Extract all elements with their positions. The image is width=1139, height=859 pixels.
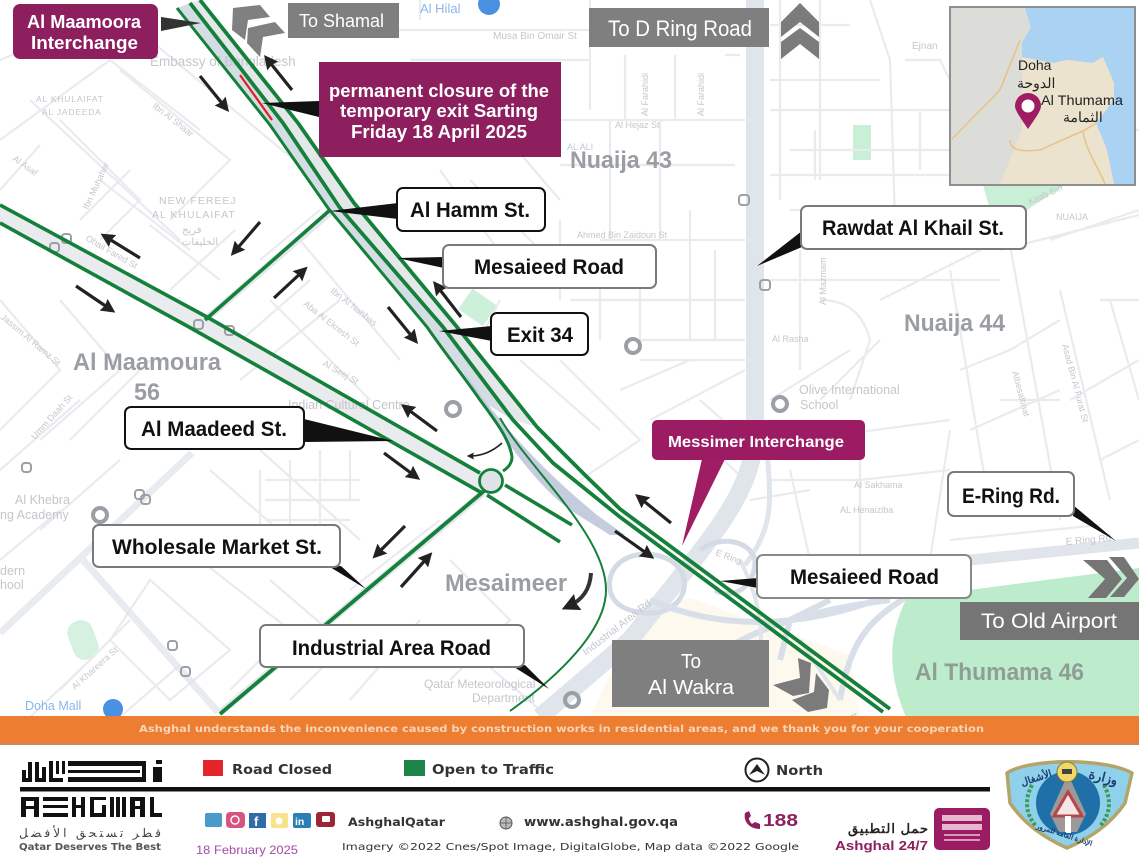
callout: Al Maadeed St.: Al Maadeed St. bbox=[141, 418, 287, 441]
street and place labels: Al Khareera St bbox=[70, 645, 120, 691]
street and place labels: AL Henaiziba bbox=[840, 505, 893, 515]
road: Industrial Area Road bbox=[220, 491, 484, 714]
street and place labels: الخليفات bbox=[182, 237, 218, 248]
traffic department emblem: وزارة bbox=[1087, 766, 1119, 789]
district labels: Nuaija 43 bbox=[570, 147, 672, 174]
legend: open to traffic: Open to Traffic bbox=[432, 762, 554, 778]
callout: Wholesale Market St. bbox=[93, 525, 366, 589]
callout: Exit 34: Exit 34 bbox=[507, 324, 573, 347]
callout: Messimer Interchange bbox=[652, 420, 865, 546]
district labels: Nuaija 44 bbox=[904, 310, 1006, 337]
icon: location pin bbox=[1015, 93, 1041, 129]
street and place labels: Doha Mall bbox=[25, 699, 81, 713]
location inset map: الثمامة bbox=[1063, 109, 1103, 125]
logo: ASHGHAL kufic mark bbox=[21, 797, 162, 817]
legend: north bbox=[746, 758, 823, 782]
district labels: Mesaimeer bbox=[445, 570, 567, 597]
district labels bbox=[73, 147, 1084, 686]
callout: Al Maamoora Interchange: Al Maamoora bbox=[27, 12, 142, 32]
callout: Mesaieed Road north bbox=[397, 245, 656, 288]
callout: E-Ring Rd.: E-Ring Rd. bbox=[962, 485, 1060, 508]
street and place labels: Qatar Meteorological bbox=[424, 677, 535, 691]
street and place labels: Department bbox=[472, 691, 535, 705]
callout: Mesaieed Road north: Mesaieed Road bbox=[474, 256, 624, 279]
direction sign: To D Ring Road bbox=[589, 3, 819, 59]
street and place labels: AL KHULAIFAT bbox=[152, 209, 236, 221]
callout: Mesaieed Road south bbox=[720, 555, 971, 598]
direction sign: To Al Wakra: To bbox=[681, 651, 701, 673]
road: Al Hamm St bbox=[205, 210, 330, 320]
callout: Al Maamoora Interchange bbox=[13, 4, 201, 59]
street and place labels: Ibn Al Nahhas bbox=[329, 286, 379, 328]
social media icons: AshghalQatar bbox=[348, 815, 445, 829]
street and place labels: NEW FEREEJ bbox=[159, 195, 237, 207]
traffic department emblem: الإدارة العامة للمرور bbox=[1034, 822, 1093, 848]
street and place labels: Al Rasha bbox=[772, 334, 809, 344]
footer legend bbox=[20, 758, 990, 792]
direction sign: To Al Wakra: Al Wakra bbox=[648, 677, 735, 699]
direction sign: To Shamal bbox=[232, 3, 399, 57]
road: Mesaieed Road main carriageway bbox=[190, 0, 890, 712]
hotline: 188 bbox=[763, 810, 798, 830]
roundabout bbox=[480, 470, 502, 492]
street and place labels: Umm Daah St bbox=[29, 392, 75, 441]
icon: chevrons down-right bbox=[773, 658, 829, 712]
street and place labels: Al Farahidi bbox=[640, 73, 650, 116]
callout: Wholesale Market St.: Wholesale Market St. bbox=[112, 536, 322, 559]
callout: Mesaieed Road south: Mesaieed Road bbox=[790, 566, 939, 589]
street and place labels: Ejnan bbox=[912, 41, 938, 52]
street and place labels: Olive International bbox=[799, 383, 900, 397]
street and place labels: AL JADEEDA bbox=[42, 107, 102, 117]
map credit: Imagery ©2022 Cnes/Spot Image, DigitalGlobe, Map data ©2022 Google bbox=[342, 842, 799, 853]
direction sign: To Shamal: To Shamal bbox=[299, 11, 384, 31]
street and place labels: AL KHULAIFAT bbox=[36, 94, 104, 104]
street and place labels: Al Mazmam bbox=[818, 257, 828, 305]
callout: Exit 34 bbox=[439, 313, 588, 355]
callout: permanent closure: Friday 18 April 2025 bbox=[351, 122, 527, 142]
street and place labels: Embassy of Bangladesh bbox=[150, 54, 296, 69]
date: 18 February 2025 bbox=[196, 843, 298, 857]
street and place labels: Albesaltinat bbox=[1010, 370, 1032, 418]
road: thin service loop bbox=[500, 418, 606, 711]
app download: حمل التطبيق bbox=[848, 821, 928, 837]
website: www.ashghal.gov.qa bbox=[524, 814, 678, 829]
street and place labels: Al Seej St bbox=[321, 358, 361, 387]
callout: Al Hamm St. bbox=[330, 188, 545, 231]
callout: permanent closure bbox=[262, 62, 561, 157]
logo: Arabic kufic mark bbox=[22, 760, 162, 782]
callout: Al Maadeed St. bbox=[125, 407, 393, 449]
callout: Al Hamm St.: Al Hamm St. bbox=[410, 199, 530, 222]
Ashghal logo: قطر تستحق الأفضل bbox=[19, 825, 161, 840]
orange notice bar bbox=[0, 716, 1139, 745]
icon: chevrons right bbox=[1083, 557, 1139, 598]
street and place labels: Al Farahidi bbox=[696, 73, 706, 116]
callout: E-Ring Rd. bbox=[948, 472, 1116, 541]
street and place labels: Al Asaf bbox=[11, 153, 40, 178]
callout: permanent closure: temporary exit Sarting bbox=[340, 101, 538, 121]
street and place labels: NUAIJA bbox=[1056, 212, 1088, 222]
legend: road closed bbox=[203, 760, 332, 778]
direction sign: To Old Airport bbox=[960, 557, 1139, 640]
callout: Rawdat Al Khail St.: Rawdat Al Khail St. bbox=[822, 217, 1004, 240]
district labels: Al Thumama 46 bbox=[915, 659, 1084, 686]
road: Al Maadeed St upper bbox=[0, 205, 572, 525]
street and place labels: Al Sakhama bbox=[854, 480, 903, 490]
street and place labels: Al Khebra bbox=[15, 493, 70, 507]
street and place labels: فريج bbox=[182, 225, 202, 236]
street and place labels: Kaab Bin bbox=[1027, 182, 1064, 207]
social media icons bbox=[205, 812, 445, 829]
location inset map: Doha bbox=[1018, 57, 1052, 73]
street and place labels: E Ring Rd bbox=[1065, 533, 1112, 548]
callout: Al Maamoora Interchange: Interchange bbox=[31, 33, 138, 53]
icon: chevrons up-left bbox=[232, 5, 285, 57]
orange notice bar: Ashghal understands the inconvenience caused by construction works in residential areas, and we thank you for your cooperation bbox=[139, 724, 984, 735]
street and place labels: AL RAYYAN bbox=[849, 710, 893, 748]
callout: Industrial Area Road bbox=[260, 625, 549, 689]
callout: Rawdat Al Khail St. bbox=[757, 206, 1026, 266]
traffic department emblem bbox=[1007, 762, 1132, 848]
callout: Industrial Area Road: Industrial Area Road bbox=[292, 637, 491, 660]
street and place labels: E Ring bbox=[714, 547, 743, 566]
street and place labels: Ahmed Bin Zaidoun St bbox=[577, 230, 668, 240]
app download bbox=[835, 808, 990, 853]
street and place labels: Aba Al Ekresh St bbox=[302, 299, 362, 348]
street and place labels: Al Hejaz St bbox=[615, 120, 660, 130]
street and place labels: Indian Cultural Centre bbox=[288, 398, 410, 412]
direction sign: To Al Wakra bbox=[612, 640, 829, 712]
legend: road closed: Road Closed bbox=[232, 762, 332, 778]
street and place labels: ng Academy bbox=[0, 508, 70, 522]
road: Al Maadeed St lower bbox=[0, 223, 560, 542]
Ashghal logo: Qatar Deserves The Best bbox=[19, 842, 161, 853]
app download: Ashghal 24/7 bbox=[835, 839, 928, 853]
location inset map bbox=[950, 7, 1135, 185]
icon: app tile bbox=[934, 808, 990, 850]
hotline bbox=[745, 810, 798, 830]
closed road segment bbox=[240, 75, 272, 120]
icon: blue map pins bbox=[103, 0, 500, 719]
location inset map: Al Thumama bbox=[1041, 92, 1123, 108]
street and place labels: Musa Bin Omair St bbox=[493, 31, 577, 42]
road band underlays bbox=[0, 0, 625, 713]
street and place labels: Ibn Al Shaar bbox=[151, 101, 196, 139]
open to traffic roads bbox=[0, 0, 890, 714]
legend: open to traffic bbox=[404, 760, 554, 778]
street and place labels: dern bbox=[0, 564, 25, 578]
street and place labels: Ibn Muhaher bbox=[81, 161, 111, 211]
district labels: Al Maamoura bbox=[73, 349, 222, 376]
district labels: 56 bbox=[134, 379, 160, 406]
social media icons: f bbox=[254, 814, 259, 829]
traffic direction arrows bbox=[76, 60, 671, 606]
street and place labels: School bbox=[800, 398, 838, 412]
Ashghal logo bbox=[19, 760, 162, 853]
street and place labels: Ohail Fared St bbox=[84, 233, 140, 271]
map place pins bbox=[22, 195, 787, 707]
social media icons: in bbox=[295, 816, 304, 828]
street and place labels: AL ALI bbox=[567, 142, 593, 152]
callout: permanent closure: permanent closure of the bbox=[329, 81, 549, 101]
icon: chevrons up bbox=[781, 3, 819, 59]
location inset map: الدوحة bbox=[1017, 75, 1055, 92]
street and place labels: Al Hilal bbox=[420, 1, 461, 16]
callout: Messimer Interchange: Messimer Interchange bbox=[668, 434, 844, 451]
street and place labels: Jassim Al Ramz St bbox=[0, 312, 63, 368]
Al Thumama park bbox=[892, 568, 1139, 717]
street and place labels: Industrial Area Rd bbox=[580, 597, 654, 658]
direction sign: To Old Airport: To Old Airport bbox=[981, 610, 1117, 633]
street and place labels: hool bbox=[0, 578, 24, 592]
direction sign: To D Ring Road: To D Ring Road bbox=[608, 16, 752, 41]
street and place labels: Asad Bin Al Furat St bbox=[1060, 343, 1091, 424]
traffic department emblem: الأشغال bbox=[1019, 767, 1054, 789]
road: exit ramp to roundabout bbox=[177, 8, 512, 471]
legend: north: North bbox=[776, 763, 823, 779]
